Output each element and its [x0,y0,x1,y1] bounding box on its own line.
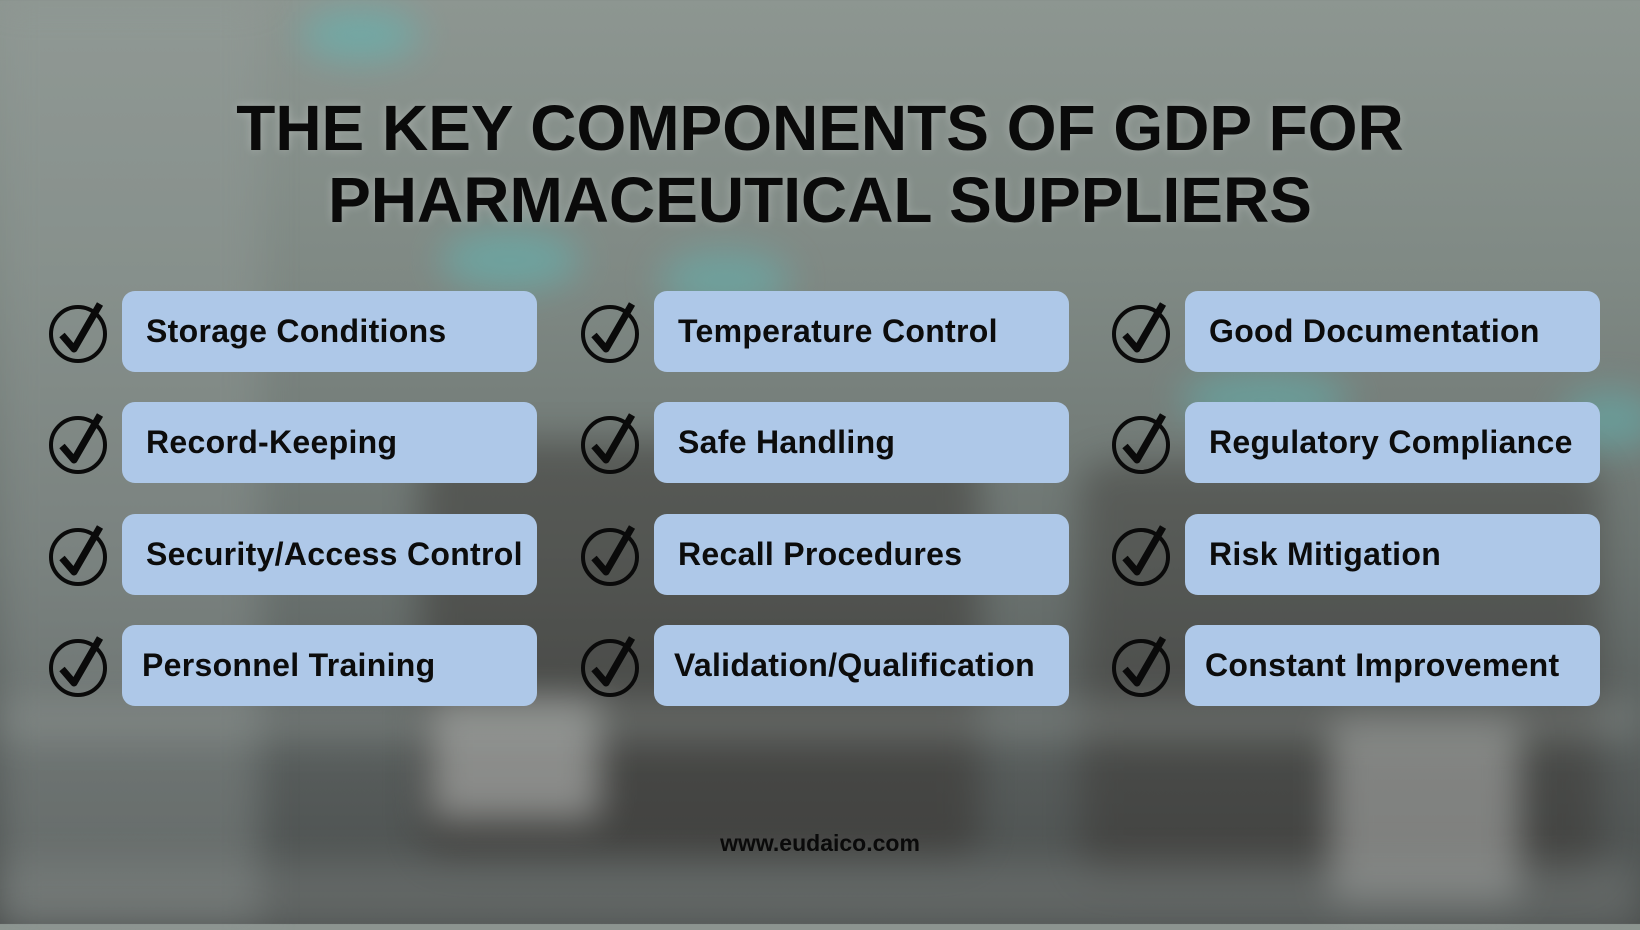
item: Good Documentation: Good Documentation [1209,313,1540,349]
icon: check [581,413,639,474]
item: Temperature Control [654,291,1069,372]
icon: check [581,636,639,697]
item: Temperature Control: Temperature Control [678,313,998,349]
item: Security/Access Control [122,514,537,595]
item: Safe Handling [654,402,1069,483]
item: Constant Improvement: Constant Improvement [1205,647,1559,683]
icon: check [49,302,107,363]
item: Regulatory Compliance: Regulatory Compliance [1209,424,1573,460]
item: Record-Keeping [122,402,537,483]
item: Validation/Qualification: Validation/Qualification [674,647,1035,683]
item: Validation/Qualification [654,625,1069,706]
item: Risk Mitigation [1185,514,1600,595]
item: Security/Access Control: Security/Access Control [146,536,523,572]
icon: check [1112,413,1170,474]
title: THE KEY COMPONENTS OF GDP FOR [236,92,1404,164]
title: PHARMACEUTICAL SUPPLIERS [328,164,1312,236]
icon: check [1112,302,1170,363]
item: Storage Conditions: Storage Conditions [146,313,447,349]
icon: check [1112,636,1170,697]
icon: check [49,636,107,697]
item: Risk Mitigation: Risk Mitigation [1209,536,1441,572]
check icons grid [49,302,1170,697]
item: Personnel Training [122,625,537,706]
item: Record-Keeping: Record-Keeping [146,424,397,460]
icon: check [581,525,639,586]
item: Safe Handling: Safe Handling [678,424,895,460]
item: Recall Procedures [654,514,1069,595]
icon: check [49,525,107,586]
title [236,92,1404,236]
item: Personnel Training: Personnel Training [142,647,435,683]
item: Recall Procedures: Recall Procedures [678,536,962,572]
icon: check [1112,525,1170,586]
icon: check [49,413,107,474]
item: Storage Conditions [122,291,537,372]
item: Good Documentation [1185,291,1600,372]
footer url: www.eudaico.com [720,830,920,856]
icon: check [581,302,639,363]
item: Constant Improvement [1185,625,1600,706]
item: Regulatory Compliance [1185,402,1600,483]
